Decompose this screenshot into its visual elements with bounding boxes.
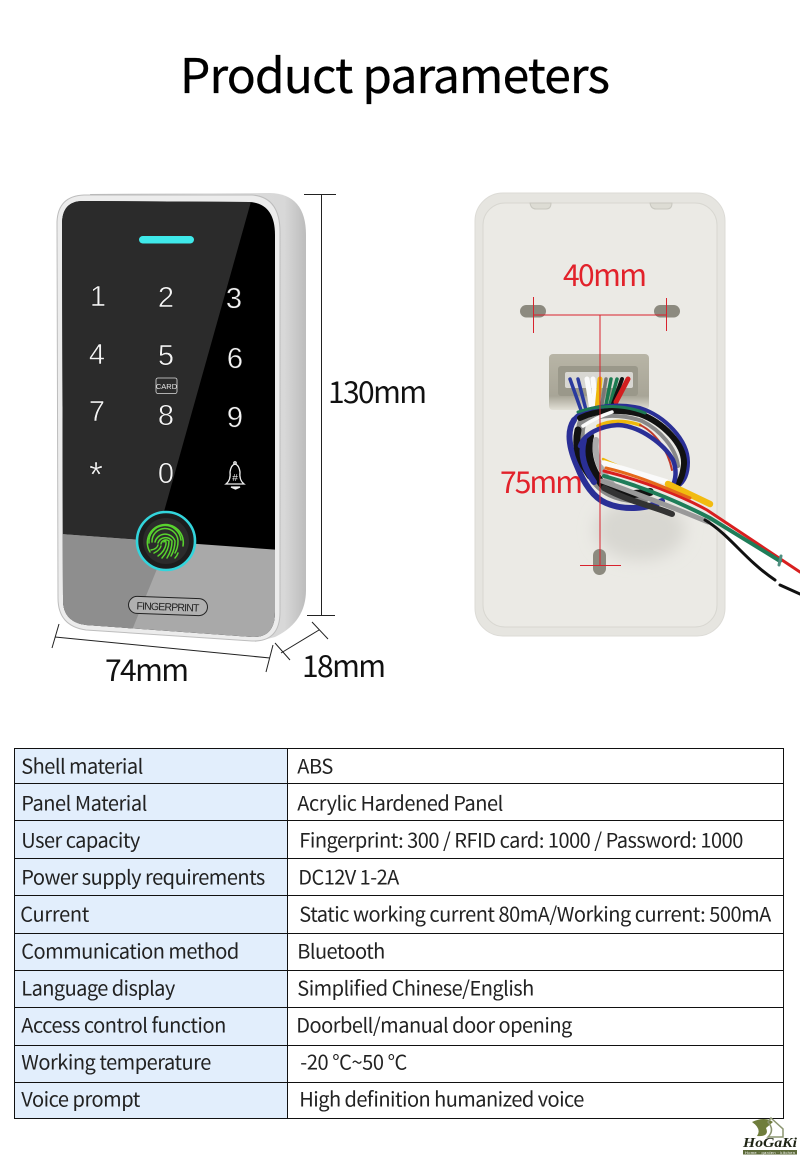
row: user capacity: User capacity [21,824,141,853]
row: current: Current [20,898,90,927]
inner plate [483,203,717,627]
row: language display: Language display [21,972,176,1001]
dimension: height 130mm [304,194,427,616]
mounting slots [520,305,680,575]
indicator light [139,236,194,244]
row: current: Static working current 80mA/Working current: 500mA [299,898,772,927]
row: working temperature: -20 °C~50 °C [300,1046,408,1075]
row: panel material: Panel Material [21,787,147,816]
dimension: depth 18mm: 18mm [302,642,386,686]
brand tagline: Home · garden · kitchen [745,1150,795,1155]
keypad digits: 8 [158,400,174,432]
row: communication method: Bluetooth [297,935,385,964]
icon: leaf and house [752,1118,783,1137]
keypad digits: 0 [158,458,174,490]
row: panel material: Acrylic Hardened Panel [297,787,503,816]
dimension label 40mm: 40mm [563,251,647,295]
keypad digits: 9 [227,402,243,434]
row: power supply: DC12V 1-2A [298,861,400,890]
row: access control function: Doorbell/manual door opening [296,1009,572,1038]
row: access control function [21,1009,572,1038]
red measurement lines [533,297,667,566]
table grid [14,748,784,1118]
row: power supply: Power supply requirements [21,861,265,890]
device front bezel [57,195,280,641]
keypad digits: 7 [89,396,105,428]
row: user capacity: Fingerprint: 300 / RFID card: 1000 / Password: 1000 [299,824,743,853]
label column background [14,748,288,1118]
row: communication method: Communication method [21,935,239,964]
row: communication method [21,935,385,964]
row: working temperature [21,1046,408,1075]
exit bundle [603,459,668,481]
card symbol [156,378,178,394]
row: shell material [21,750,333,779]
row: power supply [21,861,400,890]
row: access control function: Access control function [21,1009,226,1038]
dimension: width 74mm: 74mm [105,646,189,690]
specification table [14,748,784,1118]
knot left mass and lower loop [570,420,662,508]
row: shell material: ABS [297,750,333,779]
front view of keypad device [57,193,306,645]
keypad digits: 5 [158,340,174,372]
keypad digits: 4 [89,339,105,371]
brand name: HoGaKi [742,1136,797,1151]
keypad digits: * [89,454,103,495]
dimension label 75mm: 75mm [500,458,583,502]
row: shell material: Shell material [21,750,143,779]
fingerprint label: FINGERPRINT [136,600,200,615]
row: voice prompt: Voice prompt [21,1083,141,1112]
fingerprint label [128,596,208,616]
dimension: width 74mm [52,624,273,690]
brand logo [742,1118,797,1155]
soft wire shadow [595,500,685,560]
row: voice prompt [21,1083,584,1112]
dimension: depth 18mm [275,622,386,686]
back view of device [475,193,800,636]
row: current [20,898,772,927]
bell icon: # [232,473,238,484]
mounting tabs [530,203,672,209]
bell icon [226,462,244,489]
black touch panel [60,198,280,645]
device side shell [90,193,306,642]
keypad digits: 6 [227,343,243,375]
row: language display [21,972,534,1001]
card symbol: CARD [156,382,178,391]
upper loop strands [575,406,688,486]
dimension: height 130mm: 130mm [328,368,427,412]
row: voice prompt: High definition humanized voice [299,1083,584,1112]
title: Product parameters [180,37,610,107]
back plate [475,193,725,636]
row: panel material [21,787,503,816]
row: working temperature: Working temperature [21,1046,211,1075]
keypad digits: 2 [158,282,174,314]
keypad digits: 3 [226,283,242,315]
connector window [549,354,649,410]
row: user capacity [21,824,743,853]
wires [570,379,800,594]
keypad digits [89,281,243,495]
keypad digits: 1 [90,281,106,313]
fingerprint sensor [137,512,195,570]
row: language display: Simplified Chinese/English [297,972,534,1001]
